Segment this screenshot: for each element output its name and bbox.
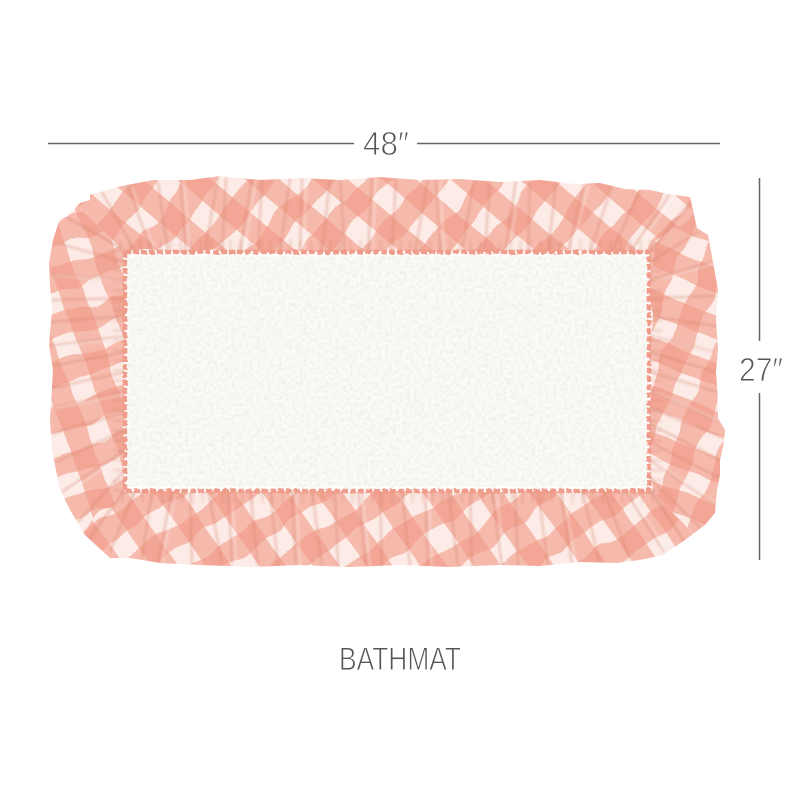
gathers along the seam (119, 246, 656, 497)
pink stitched trim (125, 252, 649, 491)
ruffle pleats: highlights (54, 178, 724, 567)
gingham ruffle border (49, 176, 725, 567)
height dimension: 27 inches: 27″ (739, 351, 783, 388)
bathmat dimension infographic (48, 132, 782, 670)
white shaggy mat centre (128, 256, 646, 487)
ruffle pleats: shadows (50, 176, 724, 566)
width dimension: 48 inches: 48″ (363, 125, 409, 162)
caption: BATHMAT (339, 641, 461, 677)
